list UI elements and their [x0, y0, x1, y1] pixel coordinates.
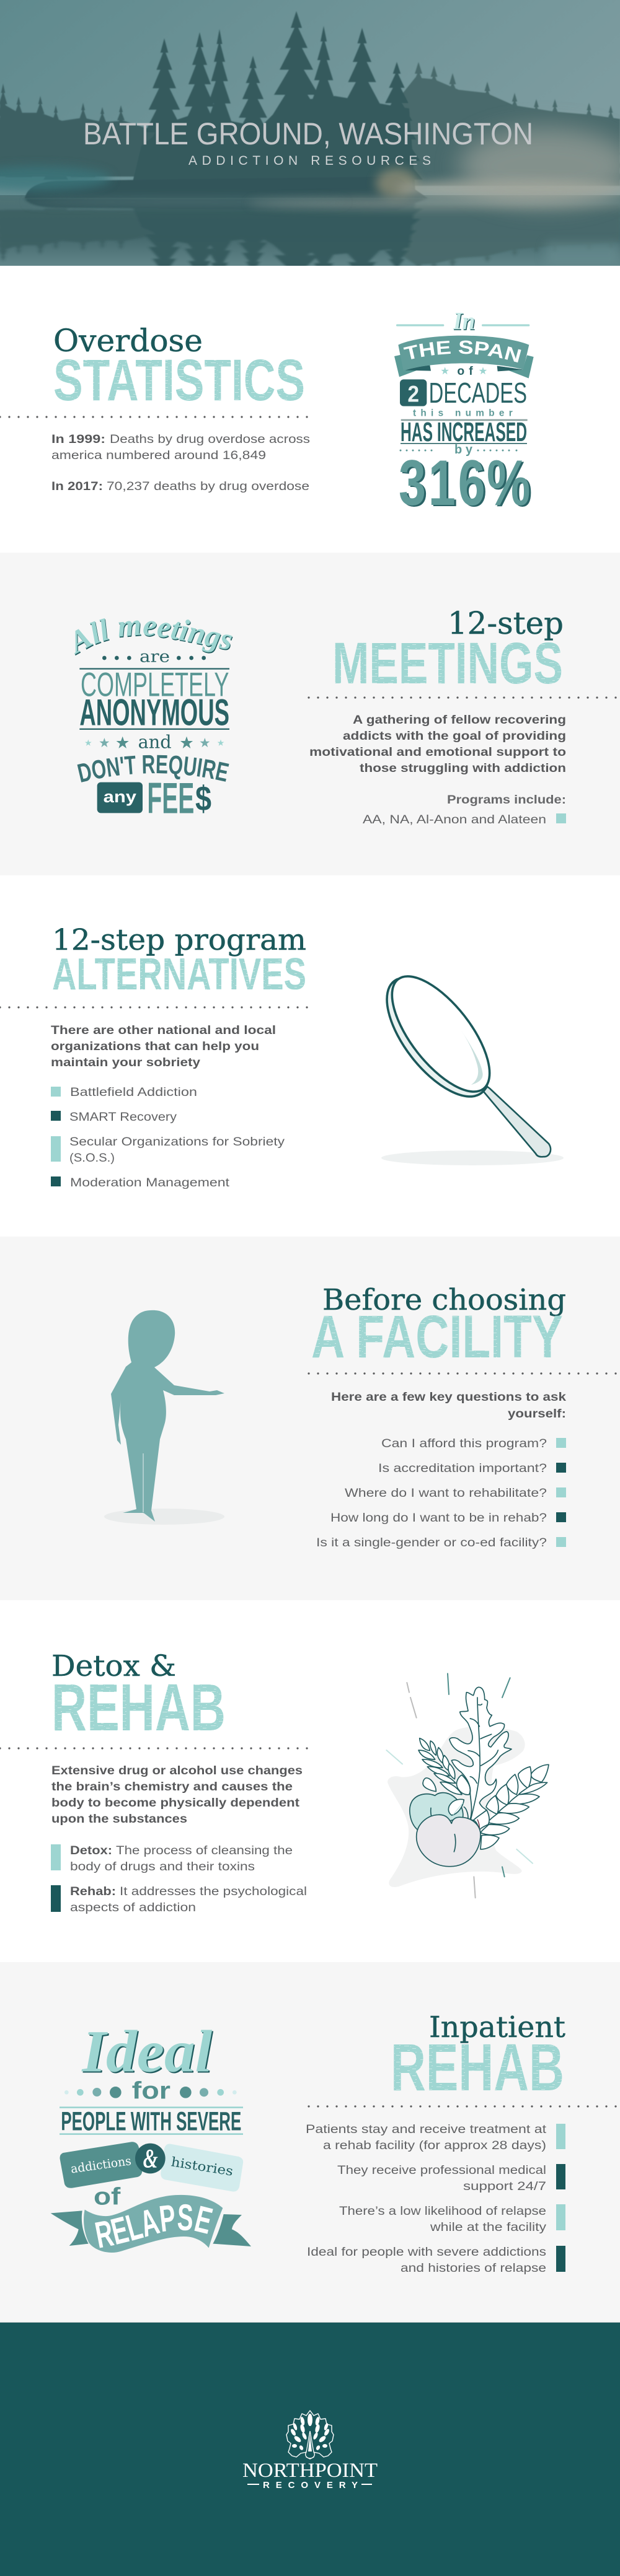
list item: programs: AA, NA, Al-Anon and Alateen — [363, 813, 546, 826]
list item: rehab — [51, 1885, 307, 1914]
text block: gathering description: A gathering of fellow recovering — [353, 714, 566, 727]
list: questions: How long do I want to be in rehab? — [330, 1512, 547, 1525]
typographic art: all meetings are completely anonymous — [74, 618, 233, 822]
text block: statistics: america numbered around 16,849 — [51, 449, 266, 462]
heading: overdose: Overdose — [53, 323, 203, 359]
list: questions: Can I afford this program? — [381, 1437, 547, 1450]
heading: statistics: STATISTICS — [53, 348, 305, 413]
heading: rehab: REHAB — [51, 1670, 226, 1745]
typographic art: 316 percent increase: THE SPAN — [403, 341, 521, 363]
text block: statistics: 70,237 deaths by drug overdose — [107, 480, 309, 493]
list item: detox: Detox: — [70, 1844, 112, 1857]
typographic art: ideal for people with severe addictions: histories — [170, 2154, 234, 2179]
panel: overdose statistics — [0, 307, 534, 520]
wordmark: northpoint recovery: RECOVERY — [263, 2480, 358, 2491]
typographic art: ideal for people with severe addictions — [51, 2018, 251, 2253]
increased block: by — [454, 443, 473, 457]
typographic art: 316 percent increase: of — [457, 365, 473, 378]
text block: other organizations: maintain your sobriety — [51, 1056, 200, 1069]
text block: key questions: Here are a few key questions to ask — [331, 1391, 566, 1404]
text block: key questions: yourself: — [508, 1408, 566, 1421]
typographic art: 316 percent increase — [394, 307, 534, 421]
heading: before choosing: Before choosing — [322, 1283, 566, 1317]
typographic art: all meetings are completely anonymous: are — [140, 647, 170, 666]
typographic art: ideal for people with severe addictions: RELAPSE — [95, 2204, 213, 2248]
typographic art: 316 percent increase: 2 — [407, 380, 419, 406]
text block: drug use description: upon the substances — [51, 1813, 187, 1826]
text block: statistics: In 2017: — [51, 480, 103, 493]
typographic art: all meetings are completely anonymous: ANONYMOUS — [79, 691, 229, 734]
heading: alternatives: ALTERNATIVES — [52, 950, 306, 999]
panel: detox and rehab — [0, 1600, 620, 1962]
text block: gathering description: addicts with the goal of providing — [343, 730, 566, 743]
typographic art: ideal for people with severe addictions: for — [132, 2077, 170, 2104]
text: programs include: Programs include: — [447, 794, 566, 807]
panel: 12-step meetings — [0, 553, 620, 875]
typographic art: ideal for people with severe addictions: Ideal — [82, 2019, 213, 2085]
list item: detox: The process of cleansing the — [116, 1844, 293, 1857]
typographic art: 316 percent increase: DECADES — [429, 377, 527, 409]
icon: person figure — [104, 1310, 224, 1525]
list: inpatient facts: and histories of relapse — [401, 2262, 546, 2275]
list: alternatives: (S.O.S.) — [69, 1152, 115, 1165]
subtitle: addiction resources: ADDICTION RESOURCES — [188, 154, 431, 168]
icon: magnifying glass — [368, 961, 564, 1165]
list item: detox — [51, 1844, 293, 1873]
typographic art: all meetings are completely anonymous: DON'T REQUIRE — [77, 755, 229, 782]
list: inpatient facts: There’s a low likelihood of relapse — [339, 2205, 546, 2218]
list: questions: Is it a single-gender or co-ed facility? — [316, 1536, 547, 1549]
text block: gathering description: motivational and emotional support to — [309, 746, 566, 759]
increased block: 316% — [401, 447, 532, 520]
increased block: 316% — [399, 446, 530, 519]
text block: statistics: Deaths by drug overdose across — [110, 433, 310, 446]
list: alternatives: Secular Organizations for Sobriety — [69, 1136, 285, 1149]
list: inpatient facts: a rehab facility (for approx 28 days) — [323, 2139, 546, 2152]
wordmark: northpoint recovery: NORTHPOINT — [242, 2460, 378, 2482]
list: questions: Is accreditation important? — [378, 1462, 547, 1475]
list: alternatives: Battlefield Addiction — [70, 1086, 197, 1099]
heading: hero title: BATTLE GROUND, WASHINGTON — [83, 116, 533, 151]
list: questions: Where do I want to rehabilitate? — [345, 1487, 547, 1500]
text block: other organizations: There are other national and local — [51, 1024, 276, 1037]
icon: fruit and leaves illustration — [386, 1673, 549, 1898]
text block: statistics — [51, 433, 310, 493]
text block: key questions — [331, 1391, 566, 1421]
list: inpatient facts: while at the facility — [430, 2221, 547, 2234]
typographic art: all meetings are completely anonymous: All meetings — [75, 620, 233, 655]
typographic art: all meetings are completely anonymous: FEE — [147, 773, 194, 822]
text block: other organizations: organizations that can help you — [51, 1040, 259, 1053]
typographic art: ideal for people with severe addictions: addictions — [69, 2153, 132, 2176]
list: inpatient facts — [306, 2123, 565, 2275]
wordmark: northpoint recovery — [242, 2460, 378, 2491]
list: questions — [316, 1437, 566, 1549]
list: inpatient facts: Ideal for people with severe addictions — [307, 2246, 546, 2259]
panel: inpatient rehab — [0, 1962, 620, 2322]
typographic art: all meetings are completely anonymous: All meetings — [74, 618, 232, 654]
panel: hero photo header — [0, 0, 620, 301]
list: alternatives: SMART Recovery — [69, 1111, 177, 1124]
icon: northpoint peacock logo — [286, 2411, 334, 2459]
list item: rehab: aspects of addiction — [70, 1901, 196, 1914]
heading: 12-step: 12-step — [448, 605, 564, 641]
typographic art: 316 percent increase: In — [453, 307, 475, 335]
text block: gathering description — [309, 714, 566, 775]
increased block — [399, 417, 532, 520]
heading: 12-step program: 12-step program — [52, 923, 306, 957]
text block: drug use description — [51, 1764, 303, 1826]
typographic art: all meetings are completely anonymous: COMPLETELY — [81, 665, 229, 703]
list item: rehab: Rehab: — [70, 1885, 116, 1898]
heading: inpatient: Inpatient — [429, 2010, 565, 2044]
increased block: HAS INCREASED — [401, 417, 527, 447]
text block: statistics: In 1999: — [51, 433, 105, 446]
text block: other organizations — [51, 1024, 276, 1069]
typographic art: ideal for people with severe addictions: & — [143, 2144, 158, 2173]
typographic art: all meetings are completely anonymous: and — [138, 731, 172, 752]
typographic art: ideal for people with severe addictions: of — [94, 2183, 121, 2210]
list item: rehab: It addresses the psychological — [120, 1885, 307, 1898]
list item: detox: body of drugs and their toxins — [70, 1860, 255, 1873]
typographic art: 316 percent increase: this number — [413, 408, 513, 419]
panel: 12-step program alternatives — [0, 875, 620, 1237]
heading: detox and: Detox & — [51, 1649, 176, 1683]
typographic art: ideal for people with severe addictions: PEOPLE WITH SEVERE — [61, 2106, 241, 2136]
typographic art: 316 percent increase: In — [453, 308, 476, 336]
panel: footer — [0, 2322, 620, 2576]
list: inpatient facts: Patients stay and receive treatment at — [306, 2123, 547, 2136]
list: inpatient facts: They receive professional medical — [337, 2164, 546, 2177]
typographic art: all meetings are completely anonymous: $ — [195, 779, 211, 818]
text block: drug use description: the brain’s chemistry and causes the — [51, 1781, 293, 1794]
typographic art: all meetings are completely anonymous: any — [104, 787, 136, 806]
panel: before choosing a facility — [0, 1237, 620, 1600]
text block: drug use description: body to become physically dependent — [51, 1797, 300, 1810]
text block: gathering description: those struggling with addiction — [360, 762, 566, 775]
list: inpatient facts: support 24/7 — [463, 2180, 546, 2193]
list: alternatives: Moderation Management — [70, 1176, 230, 1189]
text block: drug use description: Extensive drug or alcohol use changes — [51, 1764, 303, 1777]
list: alternatives — [51, 1086, 285, 1189]
typographic art: ideal for people with severe addictions: Ideal — [81, 2018, 212, 2084]
